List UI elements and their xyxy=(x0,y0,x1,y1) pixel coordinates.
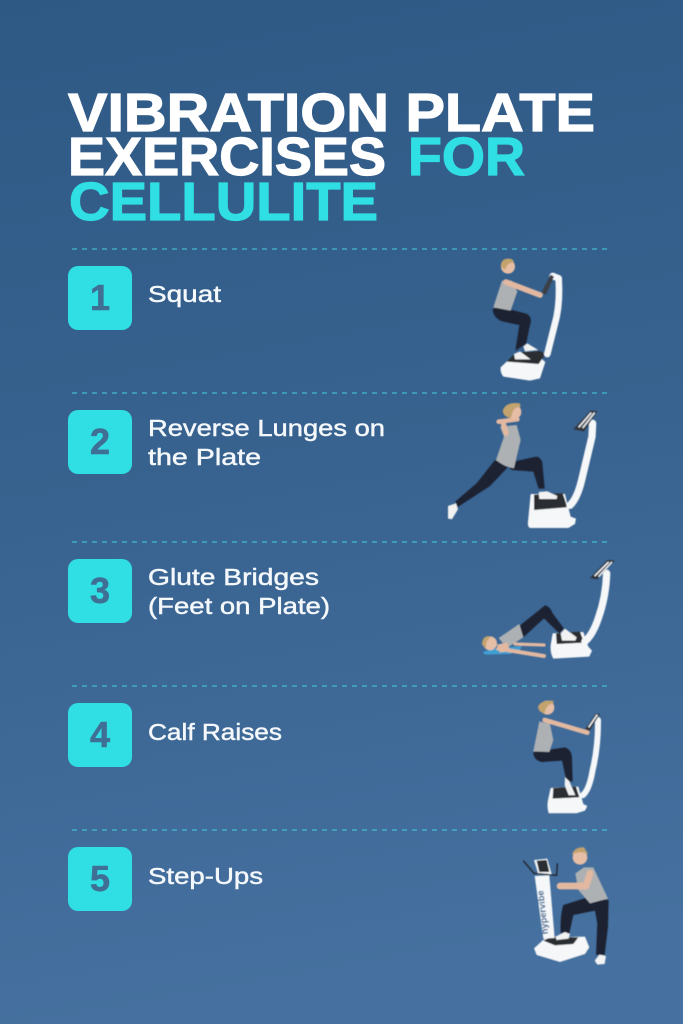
figure: woman in glute bridge with feet on plate xyxy=(482,560,615,659)
title: VIBRATION PLATE xyxy=(68,83,595,143)
label: Squat: Squat xyxy=(148,281,222,307)
panel: exercise 3 glute bridges xyxy=(68,559,615,659)
number badge 3: 3 xyxy=(90,570,110,611)
number badge 1 xyxy=(68,266,132,330)
number badge 4: 4 xyxy=(90,714,110,755)
label: Reverse Lunges on the Plate: Reverse Lunges on xyxy=(148,415,385,441)
panel: exercise 5 step-ups xyxy=(68,847,609,965)
number badge 1: 1 xyxy=(90,277,110,318)
title: CELLULITE xyxy=(69,172,378,232)
label: Glute Bridges (Feet on Plate): (Feet on Plate) xyxy=(148,593,330,619)
panel: exercise 1 squat xyxy=(68,259,559,381)
title: FOR xyxy=(408,127,525,187)
number badge 5: 5 xyxy=(90,858,110,899)
figure: woman doing calf raises on vibration plate xyxy=(533,701,600,813)
figure: woman in reverse lunge on vibration plate xyxy=(448,403,597,528)
number badge 4 xyxy=(68,703,132,767)
figure: woman stepping up on vibration plate: hypervibe xyxy=(535,890,550,935)
label: Step-Ups: Step-Ups xyxy=(148,863,263,889)
title xyxy=(68,83,595,232)
label: Calf Raises: Calf Raises xyxy=(148,719,282,745)
number badge 2 xyxy=(68,410,132,474)
number badge 3 xyxy=(68,559,132,623)
panel: exercise 2 reverse lunges xyxy=(68,403,597,528)
title: EXERCISES xyxy=(68,127,386,187)
label: Glute Bridges (Feet on Plate) xyxy=(148,564,330,619)
number badge 2: 2 xyxy=(90,421,110,462)
label: Reverse Lunges on the Plate: the Plate xyxy=(148,444,261,470)
panel: exercise 4 calf raises xyxy=(68,701,600,813)
figure: woman squatting on vibration plate xyxy=(493,259,559,381)
number badge 5 xyxy=(68,847,132,911)
label: Glute Bridges (Feet on Plate): Glute Bridges xyxy=(148,564,319,590)
label: Reverse Lunges on the Plate xyxy=(148,415,385,470)
figure: woman stepping up on vibration plate xyxy=(523,847,609,965)
